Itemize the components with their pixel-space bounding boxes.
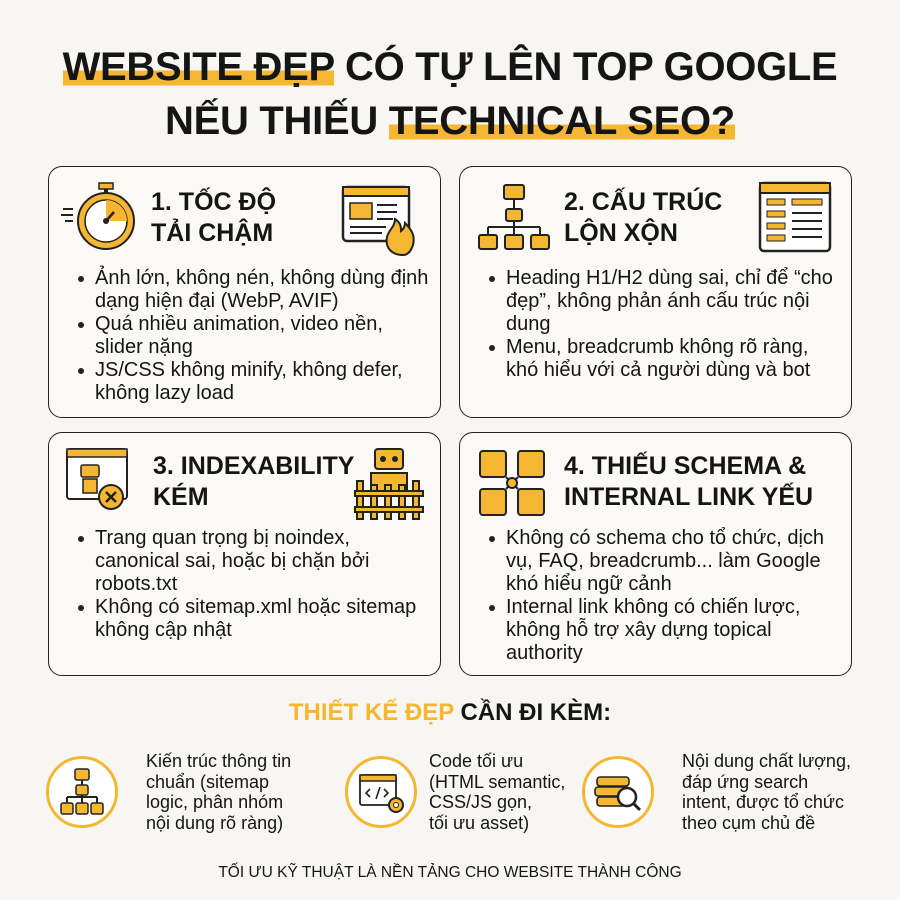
icon: code circle — [345, 756, 417, 828]
text — [429, 751, 565, 833]
heading: 4. THIẾU SCHEMA & — [564, 452, 806, 480]
text: đáp ứng search — [682, 772, 808, 792]
heading: KÉM — [153, 483, 209, 511]
icon: books magnifier circle — [582, 756, 654, 828]
bullets: Menu, breadcrumb không rõ ràng, khó hiểu với cả người dùng và bot — [506, 336, 810, 381]
icon: browser fire — [342, 186, 415, 256]
text: intent, được tổ chức — [682, 792, 844, 812]
icon: puzzle — [479, 450, 545, 516]
item: nội dung chất lượng — [582, 751, 851, 832]
heading: INTERNAL LINK YẾU — [564, 483, 813, 511]
footer: TỐI ƯU KỸ THUẬT LÀ NỀN TẢNG CHO WEBSITE THÀNH CÔNG — [218, 864, 682, 881]
text: logic, phân nhóm — [146, 792, 283, 812]
heading: TẢI CHẬM — [151, 219, 273, 247]
heading: 2. CẤU TRÚC — [564, 188, 722, 216]
text: chuẩn (sitemap — [146, 772, 269, 792]
bullets — [78, 527, 416, 641]
bullets — [78, 266, 428, 404]
icon: page layout — [758, 182, 832, 252]
text: nội dung rõ ràng) — [146, 812, 283, 832]
bullets: Trang quan trọng bị noindex, canonical sai, hoặc bị chặn bởi robots.txt — [95, 527, 369, 595]
panel: cấu trúc lộn xộn — [459, 166, 852, 418]
bullets: Quá nhiều animation, video nền, slider nặng — [95, 313, 383, 358]
title: NẾU THIẾU TECHNICAL SEO? — [165, 99, 735, 143]
text: Kiến trúc thông tin — [146, 751, 291, 771]
item: kiến trúc thông tin — [46, 751, 291, 833]
text: Code tối ưu — [429, 751, 523, 771]
text: CSS/JS gọn, — [429, 792, 532, 812]
heading: 1. TỐC ĐỘ — [151, 188, 276, 216]
panel: tốc độ tải chậm — [48, 166, 441, 418]
heading: 3. INDEXABILITY — [153, 452, 354, 480]
icon: stopwatch — [61, 182, 135, 250]
bullets: JS/CSS không minify, không defer, không lazy load — [95, 359, 403, 404]
bullets — [489, 267, 833, 381]
icon: browser robot x — [66, 448, 128, 510]
panel: thiếu schema — [459, 432, 852, 676]
heading — [564, 188, 722, 247]
text — [146, 751, 291, 833]
bullets: Không có schema cho tổ chức, dịch vụ, FAQ, breadcrumb... làm Google khó hiểu ngữ cảnh — [506, 527, 824, 595]
bullets: Không có sitemap.xml hoặc sitemap không cập nhật — [95, 596, 416, 641]
bullets: Ảnh lớn, không nén, không dùng định dạng hiện đại (WebP, AVIF) — [95, 267, 428, 312]
text: theo cụm chủ đề — [682, 812, 815, 832]
heading — [153, 452, 354, 511]
text: tối ưu asset) — [429, 812, 529, 832]
icon: hierarchy — [478, 184, 550, 250]
title: WEBSITE ĐẸP CÓ TỰ LÊN TOP GOOGLE — [63, 45, 837, 89]
bullets: Heading H1/H2 dùng sai, chỉ để “cho đẹp”, không phản ánh cấu trúc nội dung — [506, 267, 833, 335]
item: code tối ưu — [345, 751, 565, 833]
bullets: Internal link không có chiến lược, không hỗ trợ xây dựng topical authority — [506, 596, 800, 664]
text: (HTML semantic, — [429, 772, 565, 792]
text: Nội dung chất lượng, — [682, 751, 851, 771]
panel: indexability kém — [48, 432, 441, 676]
heading: LỘN XỘN — [564, 219, 678, 247]
title — [62, 44, 837, 143]
heading — [151, 187, 276, 247]
subheading: THIẾT KẾ ĐẸP CẦN ĐI KÈM: — [289, 699, 611, 726]
icon: sitemap circle — [46, 756, 118, 828]
text — [682, 751, 851, 832]
heading — [564, 452, 813, 511]
bullets — [489, 527, 824, 664]
icon: robot behind fence — [354, 448, 424, 520]
